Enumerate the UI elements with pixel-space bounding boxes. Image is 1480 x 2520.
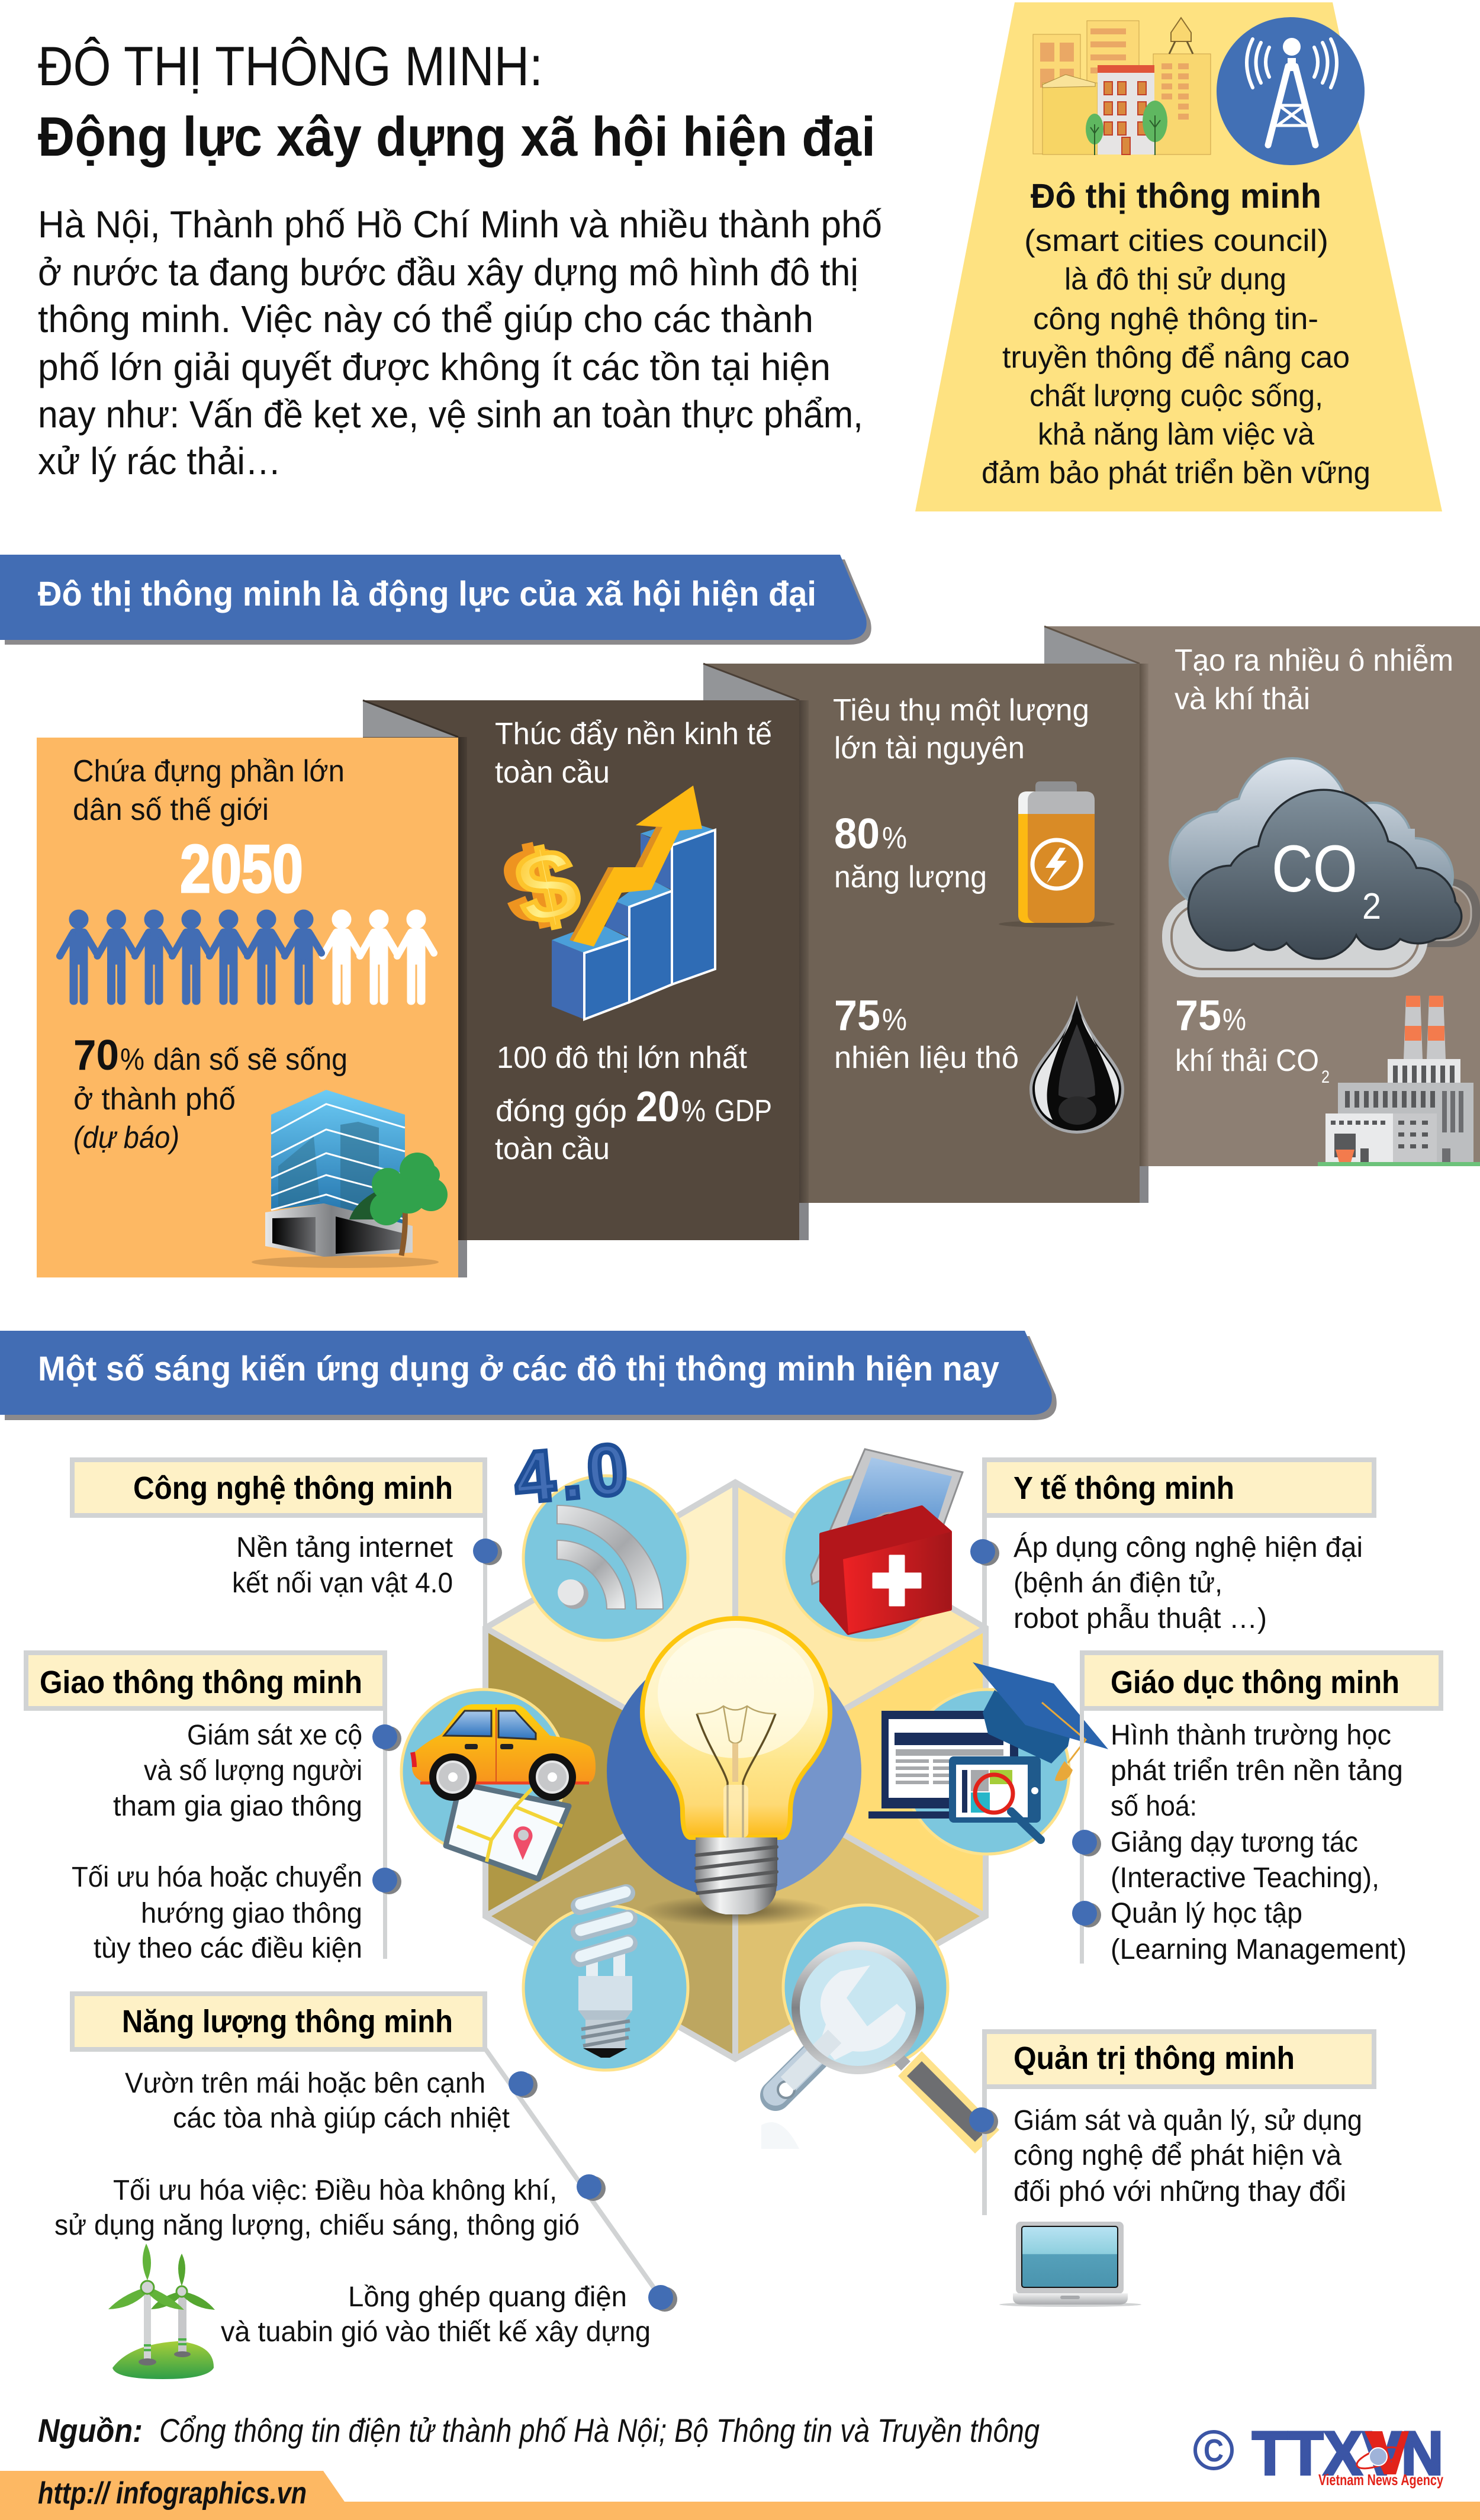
bullet text: Áp dụng công nghệ hiện đại	[1014, 1532, 1363, 1563]
bullet text: kết nối vạn vật 4.0	[232, 1568, 453, 1599]
stat: 75% CO2: 2	[1321, 1067, 1330, 1087]
panel: economy	[363, 700, 809, 1240]
icon: factory	[1318, 996, 1480, 1166]
icon: bar chart with arrow	[495, 786, 715, 1019]
bullet: gardens: các tòa nhà giúp cách nhiệt	[173, 2103, 510, 2134]
icon: car	[412, 1704, 596, 1801]
pollution heading	[1175, 643, 1453, 716]
intro text block: ở nước ta đang bước đầu xây dựng mô hình đô thị	[38, 251, 858, 294]
icon: row of people	[60, 910, 434, 1005]
bullet: interactive teaching: (Interactive Teaching),	[1111, 1862, 1379, 1894]
bullet: interactive teaching	[1072, 1827, 1379, 1894]
footer bar	[0, 2471, 1480, 2520]
panel: population	[37, 737, 467, 1277]
heading box: Giáo dục thông minh	[1111, 1665, 1399, 1700]
stat: top 100 cities GDP: GDP	[715, 1094, 772, 1128]
bullet: monitoring	[113, 1720, 401, 1822]
stat: 70% in cities	[73, 1032, 348, 1155]
stat: 75% CO2: %	[1222, 1003, 1246, 1037]
icon: wind turbines	[108, 2244, 215, 2379]
economy heading	[495, 717, 772, 790]
bullet: optimization: hướng giao thông	[141, 1898, 362, 1929]
stat: top 100 cities GDP: 100 đô thị lớn nhất	[497, 1041, 748, 1075]
logo: TTXVN: TTXVN	[1252, 2419, 1443, 2488]
bullet: solar and wind: Lồng ghép quang điện	[348, 2281, 627, 2313]
icon: tablet with magnifier	[949, 1756, 1041, 1840]
stat: 75% fuel	[834, 992, 1019, 1075]
pollution heading: và khí thải	[1175, 682, 1310, 716]
label: 4.0: 4.0	[511, 1428, 631, 1518]
stat: 80% energy: năng lượng	[834, 860, 987, 894]
bullet: monitoring: tham gia giao thông	[113, 1791, 362, 1822]
bullet: learning management: (Learning Management)	[1111, 1934, 1407, 1965]
bullet: gardens	[125, 2068, 538, 2134]
bullet: learning management: Quản lý học tập	[1111, 1898, 1302, 1929]
icon: graduation cap	[973, 1662, 1108, 1781]
bullet: solar and wind: và tuabin gió vào thiết kế xây dựng	[221, 2316, 651, 2348]
icon: dollar sign: $	[495, 824, 576, 945]
year 2050: 2050	[180, 832, 303, 907]
definition text: là đô thị sử dụng	[1064, 262, 1286, 297]
bullet: gardens: Vườn trên mái hoặc bên cạnh	[125, 2068, 485, 2099]
stat: top 100 cities GDP: đóng góp	[496, 1094, 627, 1128]
bullet text: Nền tảng internet	[236, 1532, 453, 1563]
section banner 1: Đô thị thông minh là động lực của xã hội hiện đại	[38, 575, 816, 613]
bullet: interactive teaching: Giảng dạy tương tác	[1111, 1827, 1358, 1858]
logo: TTXVN: C	[1204, 2433, 1224, 2468]
stat: 70% in cities: ở thành phố	[73, 1082, 236, 1116]
title	[38, 35, 876, 168]
heading box	[1082, 1653, 1441, 1708]
callout: smart governance	[969, 2032, 1374, 2307]
bullet text	[232, 1532, 502, 1599]
stat: 80% energy: %	[882, 821, 907, 855]
stat: top 100 cities GDP: toàn cầu	[495, 1132, 610, 1166]
population heading: dân số thế giới	[73, 793, 269, 827]
economy heading: toàn cầu	[495, 755, 610, 790]
heading box	[72, 1460, 485, 1515]
pollution heading: Tạo ra nhiều ô nhiễm	[1175, 643, 1453, 678]
source line: Nguồn:	[38, 2412, 143, 2449]
panel: pollution	[1044, 626, 1480, 1166]
population heading	[73, 754, 345, 827]
icon: CFL bulb	[578, 1892, 632, 2058]
panel: definition trapezoid	[915, 2, 1442, 511]
stat: 70% in cities: 70	[73, 1032, 119, 1079]
icon: CO2 cloud: 2	[1362, 886, 1381, 927]
bullet text: công nghệ để phát hiện và	[1014, 2140, 1341, 2171]
stat: top 100 cities GDP	[495, 1041, 772, 1166]
bullet text	[969, 2105, 1362, 2207]
stat: 75% fuel: %	[882, 1003, 907, 1037]
bullet text: robot phẫu thuật …)	[1014, 1602, 1267, 1634]
icon: city buildings	[1033, 18, 1211, 155]
heading box: Giao thông thông minh	[40, 1665, 362, 1700]
definition text: chất lượng cuộc sống,	[1029, 379, 1323, 413]
title: ĐÔ THỊ THÔNG MINH:	[38, 35, 543, 97]
description text	[1111, 1720, 1403, 1822]
intro text block: nay như: Vấn đề kẹt xe, vệ sinh an toàn thực phẩm,	[38, 393, 863, 436]
heading box: Y tế thông minh	[1014, 1470, 1234, 1506]
callout: smart technology	[72, 1460, 502, 1628]
icon: map	[446, 1784, 569, 1879]
section banner 2	[0, 1331, 1057, 1420]
stat: 75% CO2: 75	[1175, 992, 1221, 1039]
stat: 75% fuel: 75	[834, 992, 880, 1039]
heading box	[72, 1994, 485, 2049]
intro text block: Hà Nội, Thành phố Hồ Chí Minh và nhiều thành phố	[38, 203, 882, 246]
description text: phát triển trên nền tảng	[1111, 1755, 1403, 1787]
source line: Cổng thông tin điện tử thành phố Hà Nội; Bộ Thông tin và Truyền thông	[159, 2412, 1040, 2449]
icon: glass building with tree	[252, 1090, 448, 1268]
description text: Hình thành trường học	[1111, 1720, 1391, 1751]
definition text: Đô thị thông minh	[1031, 177, 1321, 215]
heading box: Công nghệ thông minh	[133, 1470, 453, 1506]
bullet: optimization	[54, 2174, 606, 2241]
bullet text: đối phó với những thay đổi	[1014, 2176, 1346, 2207]
bullet: optimization: tùy theo các điều kiện	[94, 1933, 362, 1964]
description text: số hoá:	[1111, 1791, 1197, 1822]
icon: dollar sign: $	[507, 826, 588, 947]
section banner 1	[0, 555, 871, 645]
heading box: Năng lượng thông minh	[122, 2004, 453, 2039]
population heading: Chứa đựng phần lớn	[73, 754, 345, 788]
icon: battery	[999, 781, 1115, 928]
heading box: Quản trị thông minh	[1014, 2041, 1295, 2076]
intro text block: thông minh. Việc này có thể giúp cho các thành	[38, 298, 813, 340]
icon bubble: traffic	[401, 1689, 596, 1879]
panel: resources	[703, 664, 1148, 1203]
icon bubble: energy saving bulb	[523, 1892, 688, 2070]
bullet: monitoring: Giám sát xe cộ	[187, 1720, 362, 1751]
definition text: công nghệ thông tin-	[1033, 302, 1318, 336]
bullet: solar and wind	[221, 2281, 677, 2348]
resources heading: Tiêu thụ một lượng	[833, 693, 1089, 728]
icon: CO2 cloud: CO	[1272, 832, 1357, 906]
definition text	[982, 177, 1370, 490]
stat: 80% energy: 80	[834, 810, 880, 858]
icon: first aid kit	[821, 1507, 950, 1633]
footer bar: http:// infographics.vn	[38, 2476, 307, 2511]
section banner 2: Một số sáng kiến ứng dụng ở các đô thị thông minh hiện nay	[38, 1350, 999, 1388]
icon bubble: healthcare	[784, 1449, 963, 1640]
icon: magnifier with wrench	[761, 1946, 999, 2154]
definition text: (smart cities council)	[1024, 224, 1328, 258]
definition text: khả năng làm việc và	[1038, 417, 1314, 452]
stat: 70% in cities: dân số sẽ sống	[153, 1042, 348, 1077]
resources heading	[833, 693, 1089, 765]
icon bubble: governance	[761, 1905, 999, 2154]
definition text: truyền thông để nâng cao	[1002, 340, 1350, 375]
heading box	[26, 1653, 385, 1708]
callout: smart energy	[54, 1994, 677, 2379]
economy heading: Thúc đẩy nền kinh tế	[495, 717, 772, 751]
stat: 75% fuel: nhiên liệu thô	[834, 1041, 1019, 1075]
bullet: optimization	[72, 1862, 401, 1964]
callout: smart education	[1072, 1653, 1441, 1965]
callout: smart health	[970, 1460, 1374, 1634]
icon: main light bulb	[641, 1618, 831, 1926]
stat: top 100 cities GDP: 20	[636, 1083, 680, 1131]
intro text block	[38, 203, 882, 482]
hexagon diagram	[401, 1428, 1108, 2154]
definition text: đảm bảo phát triển bền vững	[982, 456, 1370, 490]
icon bubble: internet of things	[511, 1428, 688, 1640]
bullet: optimization: Tối ưu hóa việc: Điều hòa không khí,	[113, 2175, 557, 2206]
title: Động lực xây dựng xã hội hiện đại	[38, 105, 876, 168]
icon: tablet	[811, 1449, 963, 1584]
logo: TTXVN: Vietnam News Agency	[1318, 2471, 1443, 2489]
stat: 70% in cities: %	[120, 1042, 144, 1077]
intro text block: phố lớn giải quyết được không ít các tồn tại hiện	[38, 346, 831, 388]
stat: 75% CO2: khí thải CO	[1175, 1044, 1319, 1078]
intro text block: xử lý rác thải…	[38, 440, 281, 482]
central blue circle	[607, 1644, 861, 1898]
icon: wifi signal	[557, 1505, 663, 1609]
heading box	[984, 1460, 1374, 1515]
bullet: optimization: sử dụng năng lượng, chiếu sáng, thông gió	[54, 2210, 580, 2241]
bullet: monitoring: và số lượng người	[144, 1755, 362, 1787]
stat: 70% in cities: (dự báo)	[73, 1121, 179, 1155]
bullet: learning management	[1072, 1898, 1407, 1965]
bullet text: Giám sát và quản lý, sử dụng	[1014, 2105, 1362, 2136]
icon: laptop	[999, 2222, 1141, 2307]
icon: laptop	[868, 1711, 1018, 1819]
resources heading: lớn tài nguyên	[834, 731, 1025, 765]
stat: top 100 cities GDP: %	[681, 1094, 706, 1128]
bullet text	[970, 1532, 1363, 1634]
icon: CO2 cloud	[1162, 759, 1480, 977]
callout: smart transport	[26, 1653, 401, 1964]
stat: 75% CO2	[1175, 992, 1330, 1087]
stat: 80% energy	[834, 810, 987, 894]
icon: signal tower	[1217, 17, 1365, 165]
icon bubble: education	[868, 1662, 1108, 1854]
bullet: optimization: Tối ưu hóa hoặc chuyển	[72, 1862, 362, 1893]
bullet text: (bệnh án điện tử,	[1014, 1568, 1222, 1599]
heading box	[984, 2032, 1374, 2087]
icon: oil drop	[1029, 995, 1124, 1134]
